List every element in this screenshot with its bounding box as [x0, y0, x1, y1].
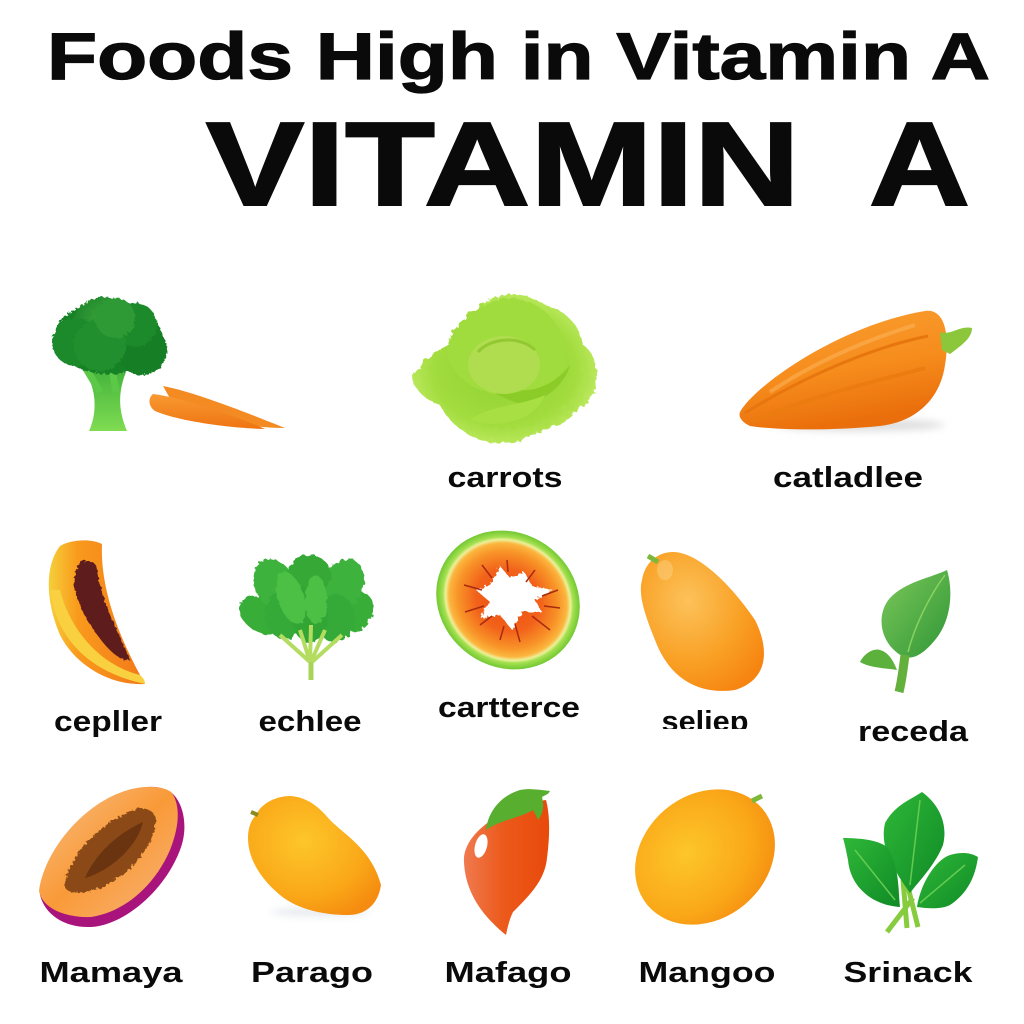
label: Mafago: Mafago [444, 957, 572, 989]
label: Mamaya: Mamaya [40, 957, 184, 989]
label: cepller: cepller [54, 706, 162, 738]
subtitle: VITAMIN A: VITAMIN [206, 98, 800, 231]
title: Foods High in Vitamin A [47, 19, 990, 93]
icon: fruit cross-section [409, 503, 607, 697]
subtitle: VITAMIN A: A [869, 98, 970, 231]
label: catladlee: catladlee [773, 462, 923, 494]
icon: green leaf [860, 570, 950, 692]
label: echlee: echlee [258, 706, 362, 738]
label: carrots: carrots [448, 462, 562, 494]
icon: large carrot [739, 311, 972, 431]
icon: halved papaya [39, 787, 184, 927]
subtitle: VITAMIN A [206, 98, 970, 231]
label: Mangoo: Mangoo [638, 957, 776, 989]
icon: mango [248, 796, 381, 916]
icon: leafy greens [233, 552, 382, 680]
icon: papaya slice [49, 540, 145, 684]
label: Srinack: Srinack [844, 957, 974, 989]
label: Parago: Parago [251, 957, 373, 989]
label: cartterce: cartterce [438, 692, 580, 724]
icon: lettuce [412, 294, 597, 443]
label: seliep: seliep [662, 706, 748, 738]
icon: spinach leaves [843, 792, 978, 932]
icon: broccoli and carrots [52, 297, 285, 431]
icon: orange fruit [641, 552, 764, 691]
label: receda: receda [858, 716, 969, 748]
icon: mango large [608, 761, 802, 953]
icon: red-orange fruit with leaf [464, 789, 550, 935]
